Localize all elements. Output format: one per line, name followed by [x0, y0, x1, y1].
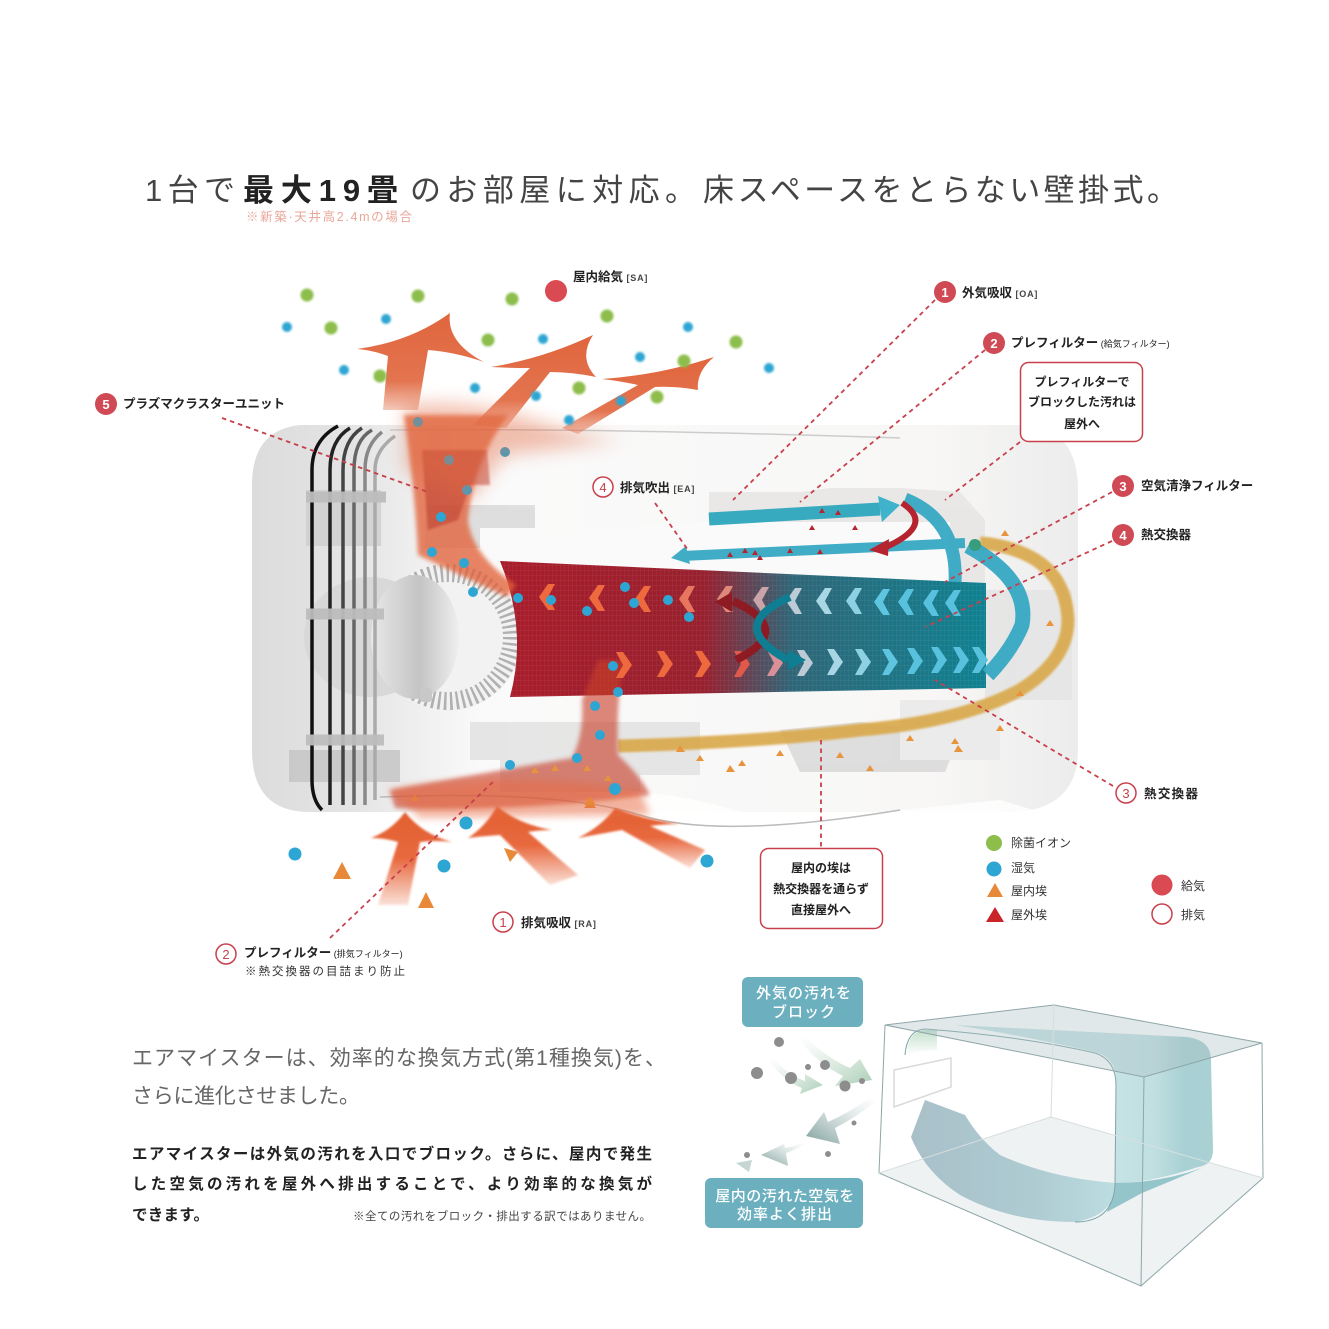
- title: 最大19畳: [243, 173, 398, 208]
- label: 3 熱交換器: 3: [1122, 786, 1130, 801]
- legend: 屋内埃: [1011, 883, 1047, 898]
- arrows: incoming air: [770, 1037, 872, 1094]
- red internal duct: [422, 450, 490, 530]
- label: 1 外気吸収: 1: [941, 285, 949, 300]
- orange exhaust flow rising from bottom duct into core: [390, 660, 650, 809]
- label: 4 熱交換器: 熱交換器: [1141, 527, 1192, 542]
- legend: 排気: [1181, 907, 1205, 922]
- device body: [252, 425, 1078, 812]
- supply airflow: outside air blue arrows: [671, 496, 1023, 675]
- label: 2 プレフィルター: [983, 332, 1170, 354]
- legend: 除菌イオン: [1011, 836, 1071, 850]
- callout: room dust: 屋内の埃は: [791, 860, 851, 875]
- central heat exchange arcs: [715, 592, 806, 670]
- label: 2 プレフィルター 排気: [216, 944, 405, 978]
- back air sheet: [955, 1025, 1213, 1183]
- callout: room dust: 熱交換器を通らず: [773, 881, 869, 896]
- label: 2 プレフィルター 排気: プレフィルター (排気フィルター): [244, 946, 403, 960]
- legend: 給気: [1181, 878, 1205, 893]
- legend: 屋外埃: [1011, 907, 1047, 922]
- airflow: indoor supply arrows (upper): [357, 313, 714, 500]
- pollutant particles: [744, 1037, 865, 1158]
- label: 4 熱交換器: 4: [1119, 528, 1127, 543]
- legend: [986, 835, 1205, 924]
- orange supply flow leaving fan up through device: [404, 415, 516, 597]
- callout: prefilter: 屋外へ: [1064, 416, 1100, 431]
- label: 2 プレフィルター 排気: ※熱交換器の目詰まり防止: [245, 964, 405, 978]
- room diagram: [879, 1005, 1263, 1286]
- internal parts: [289, 488, 1072, 825]
- label: 5 プラズマクラスターユニット: 5: [102, 397, 110, 412]
- room edges: [879, 1025, 1263, 1286]
- label: 3 空気清浄フィルター: 空気清浄フィルター: [1141, 478, 1253, 493]
- callout: room dust: [760, 848, 882, 928]
- panel: device cutaway: [252, 415, 1078, 826]
- badge: exhaust indoor air: 効率よく排出: [737, 1206, 833, 1223]
- heading: efficient ventilation: エアマイスターは、効率的な換気方式(第1種換気)を、: [132, 1047, 666, 1070]
- particles: indoor air moisture and dust: [288, 783, 714, 908]
- moisture particles in device: [413, 417, 694, 770]
- chevrons: top row: [539, 584, 961, 616]
- label: 4 排気吹出: 排気吹出 [EA]: [620, 480, 695, 495]
- label: 2 プレフィルター: 2: [990, 336, 998, 351]
- floor ribbon: [1107, 1168, 1202, 1212]
- particles: supply air ions and moisture: [282, 288, 774, 425]
- chevrons: bottom row: [616, 647, 988, 678]
- label: 3 空気清浄フィルター: 3: [1119, 479, 1127, 494]
- label: 1 外気吸収: 外気吸収 [OA]: [962, 285, 1038, 300]
- label: 2 プレフィルター: プレフィルター (給気フィルター): [1011, 336, 1170, 350]
- airflow: room exhaust arrows (lower): [371, 780, 705, 905]
- fan: [304, 563, 522, 711]
- footnote: title: ※新築·天井高2.4mの場合: [246, 209, 412, 224]
- lower air ribbon: [911, 1100, 1115, 1222]
- title: のお部屋に対応。: [410, 173, 696, 208]
- label: 2 プレフィルター 排気: 2: [222, 947, 230, 962]
- label: 1 排気吸収: [493, 912, 597, 932]
- badge: block outside dirt: [742, 977, 863, 1027]
- legend: 湿気: [1011, 860, 1035, 875]
- label: 屋内給気: 屋内給気 [SA]: [573, 269, 648, 284]
- arrows: outgoing air: [736, 1098, 875, 1172]
- label: 4 熱交換器: [1112, 524, 1192, 546]
- yellow room-dust bypass: [618, 543, 1068, 746]
- label: 4 排気吹出: 4: [599, 480, 607, 495]
- body text: した空気の汚れを屋外へ排出することで、より効率的な換気が: [132, 1174, 652, 1193]
- title: 床スペースをとらない壁掛式。: [703, 173, 1178, 208]
- label: 5 プラズマクラスターユニット: [95, 393, 285, 415]
- heading: efficient ventilation: さらに進化させました。: [132, 1085, 360, 1108]
- label: 1 排気吸収: 1: [499, 915, 507, 930]
- body text: エアマイスターは外気の汚れを入口でブロック。さらに、屋内で発生: [132, 1144, 652, 1163]
- body text: できます。: [132, 1206, 209, 1224]
- wall unit: [894, 1058, 951, 1107]
- heading: efficient ventilation: [132, 1047, 666, 1108]
- label: 3 空気清浄フィルター: [1112, 475, 1253, 497]
- badge: exhaust indoor air: 屋内の汚れた空気を: [715, 1188, 855, 1205]
- red return arrow top: [869, 503, 915, 556]
- body text: [132, 1144, 652, 1224]
- title: 1台で: [145, 173, 235, 208]
- badge: block outside dirt: 外気の汚れを: [756, 985, 852, 1002]
- label: 3 熱交換器: [1116, 783, 1198, 803]
- label: 1 排気吸収: 排気吸収 [RA]: [521, 915, 597, 930]
- label: 屋内給気: [545, 269, 648, 302]
- inlet ribbon: [907, 1030, 937, 1055]
- leader lines: [222, 300, 1113, 938]
- label: 1 外気吸収: [934, 281, 1038, 303]
- room floor: [879, 1117, 1263, 1286]
- callout: prefilter: プレフィルターで: [1034, 375, 1130, 389]
- callout: prefilter: [1020, 362, 1142, 442]
- callout: prefilter: ブロックした汚れは: [1028, 394, 1136, 409]
- label: 3 熱交換器: 熱交換器: [1144, 786, 1198, 801]
- tiny dust particles in device: [411, 508, 1054, 808]
- callout: room dust: 直接屋外へ: [791, 902, 851, 917]
- ceiling: [885, 1005, 1262, 1077]
- heat exchanger core: [500, 561, 986, 697]
- label: 4 排気吹出: [593, 477, 695, 497]
- label: 5 プラズマクラスターユニット: プラズマクラスターユニット: [123, 396, 285, 411]
- footnote: not all dirt: ※全ての汚れをブロック・排出する訳ではありません。: [353, 1209, 651, 1223]
- title: [145, 173, 1178, 208]
- badge: block outside dirt: ブロック: [772, 1003, 836, 1021]
- badge: exhaust indoor air: [705, 1178, 863, 1228]
- ribbon outline: [905, 1029, 1116, 1222]
- front vent louvres: [306, 426, 900, 826]
